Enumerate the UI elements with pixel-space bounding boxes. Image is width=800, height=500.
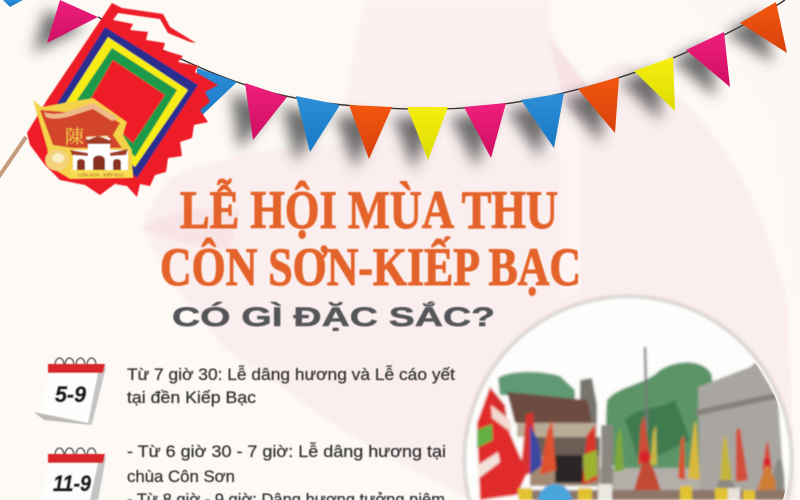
offerings [633,460,662,492]
logo calligraphy: 陳 [65,122,84,149]
event text: 11-9: chùa Côn Sơn [127,467,235,486]
event text: 11-9 [127,442,446,500]
title [160,178,581,297]
calendar: 11-9 [42,448,106,500]
right trees [606,362,715,470]
temple [578,376,598,425]
big flag [477,387,527,500]
festival banners [520,412,537,478]
bunting flag shadows [33,10,773,170]
blue umbrella [538,484,572,500]
event text: 11-9: - Từ 6 giờ 30 - 7 giờ: Lễ dâng hương tại [127,442,446,461]
event text: 5-9: Từ 7 giờ 30: Lễ dâng hương và Lễ cáo yết [127,365,455,384]
calendar: 5-9: 5-9 [55,382,87,407]
subtitle: CÓ GÌ ĐẶC SẮC? [172,301,495,332]
logo temple [73,150,128,170]
title: LỄ HỘI MÙA THU [180,178,558,240]
crowd [520,490,790,500]
logo badge: CÔN SƠN · KIẾP BẠC [78,172,125,178]
stone wall behind crowd [597,468,702,496]
title: CÔN SƠN-KIẾP BẠC [160,236,581,297]
bunting string [98,0,785,109]
logo cloud [45,149,69,171]
kite stick [0,137,26,178]
photo ring [464,296,792,500]
kite [27,3,218,197]
stone gate [698,362,785,500]
calendar: 11-9: 11-9 [53,471,92,496]
festival photo [475,345,786,500]
event text: 5-9: tại đền Kiếp Bạc [127,388,257,407]
flagpole [645,347,647,430]
left trees [498,372,575,400]
small tower [601,425,613,485]
event text: 5-9 [127,365,455,407]
calendar: 5-9 [34,358,106,425]
bunting flags [3,0,787,160]
logo badge [33,98,133,179]
